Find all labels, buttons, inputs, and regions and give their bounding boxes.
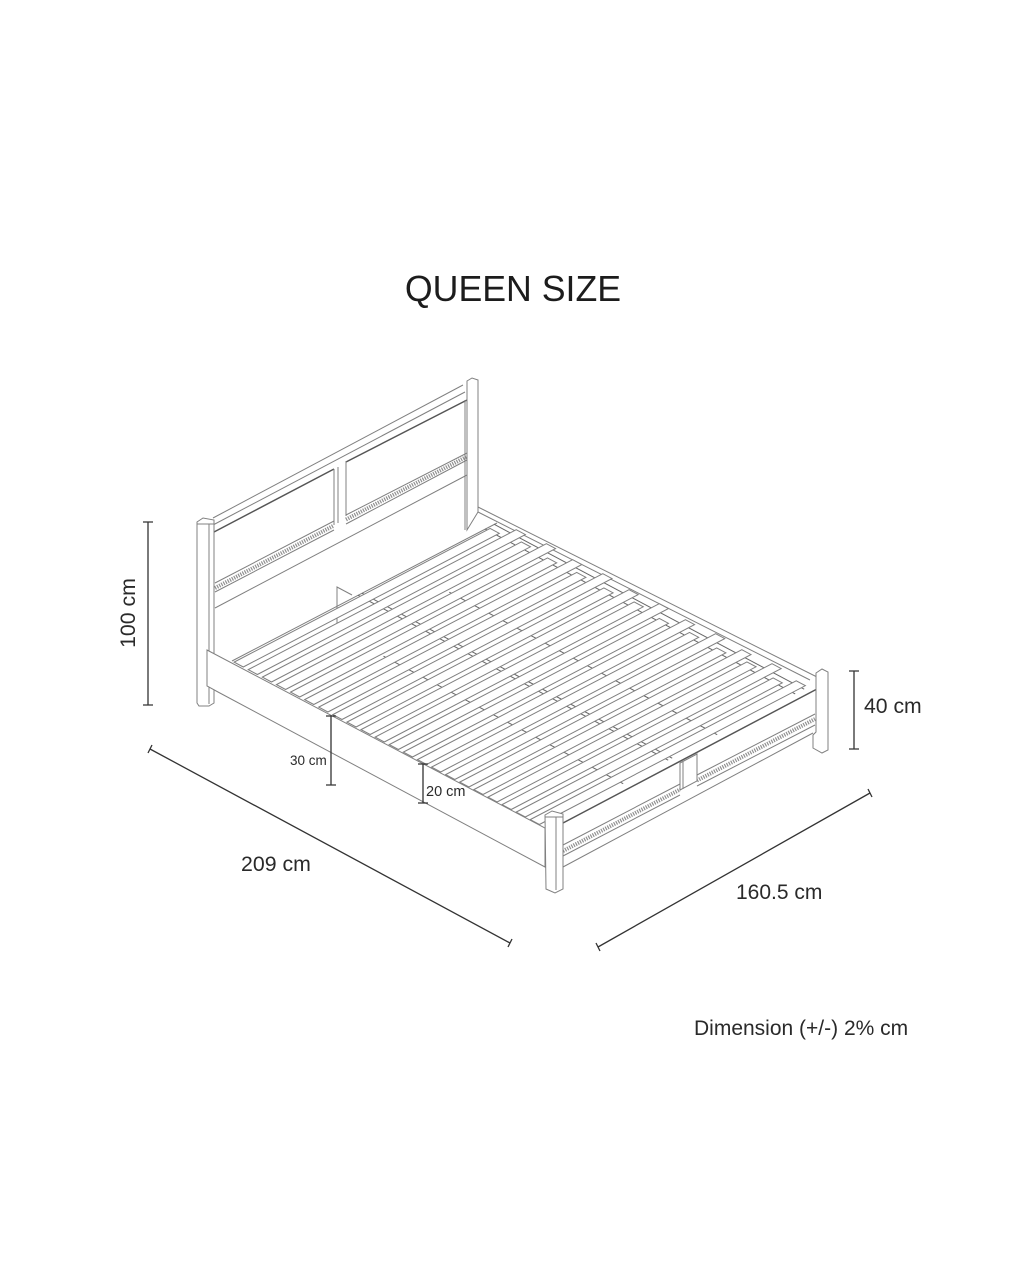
dimension: headboard height 100 cm: 100 cm — [116, 578, 140, 648]
dimension: width 160.5 cm — [596, 789, 872, 951]
foot rail — [563, 688, 817, 867]
foot front post — [545, 811, 563, 893]
dimension: 20 cm: 20 cm — [426, 784, 466, 800]
title: QUEEN SIZE — [405, 269, 621, 309]
dimension: foot height 40 cm: 40 cm — [864, 695, 922, 718]
slatted mattress base — [232, 507, 817, 826]
bed illustration — [197, 378, 828, 893]
foot rail centre post — [680, 754, 697, 790]
dimension: length 209 cm: 209 cm — [241, 852, 311, 876]
dimension: 30 cm: 30 cm — [290, 753, 327, 768]
dimension: length 209 cm — [148, 745, 512, 947]
support beams seen between slats — [313, 524, 804, 784]
dimension: headboard height 100 cm — [116, 522, 153, 705]
headboard — [197, 378, 478, 706]
foot right post — [813, 669, 828, 753]
tolerance note: Dimension (+/-) 2% cm — [694, 1017, 908, 1040]
long side rail — [207, 650, 545, 867]
slats — [234, 521, 809, 824]
dimension: foot height 40 cm — [849, 671, 922, 749]
dimension: width 160.5 cm: 160.5 cm — [736, 881, 822, 904]
dimension: 30 cm — [290, 716, 336, 785]
bracket behind the slats — [337, 587, 352, 627]
headboard left post — [197, 518, 214, 706]
headboard right post — [467, 378, 478, 530]
dimension: 20 cm — [418, 764, 466, 803]
right side rail — [478, 507, 817, 680]
